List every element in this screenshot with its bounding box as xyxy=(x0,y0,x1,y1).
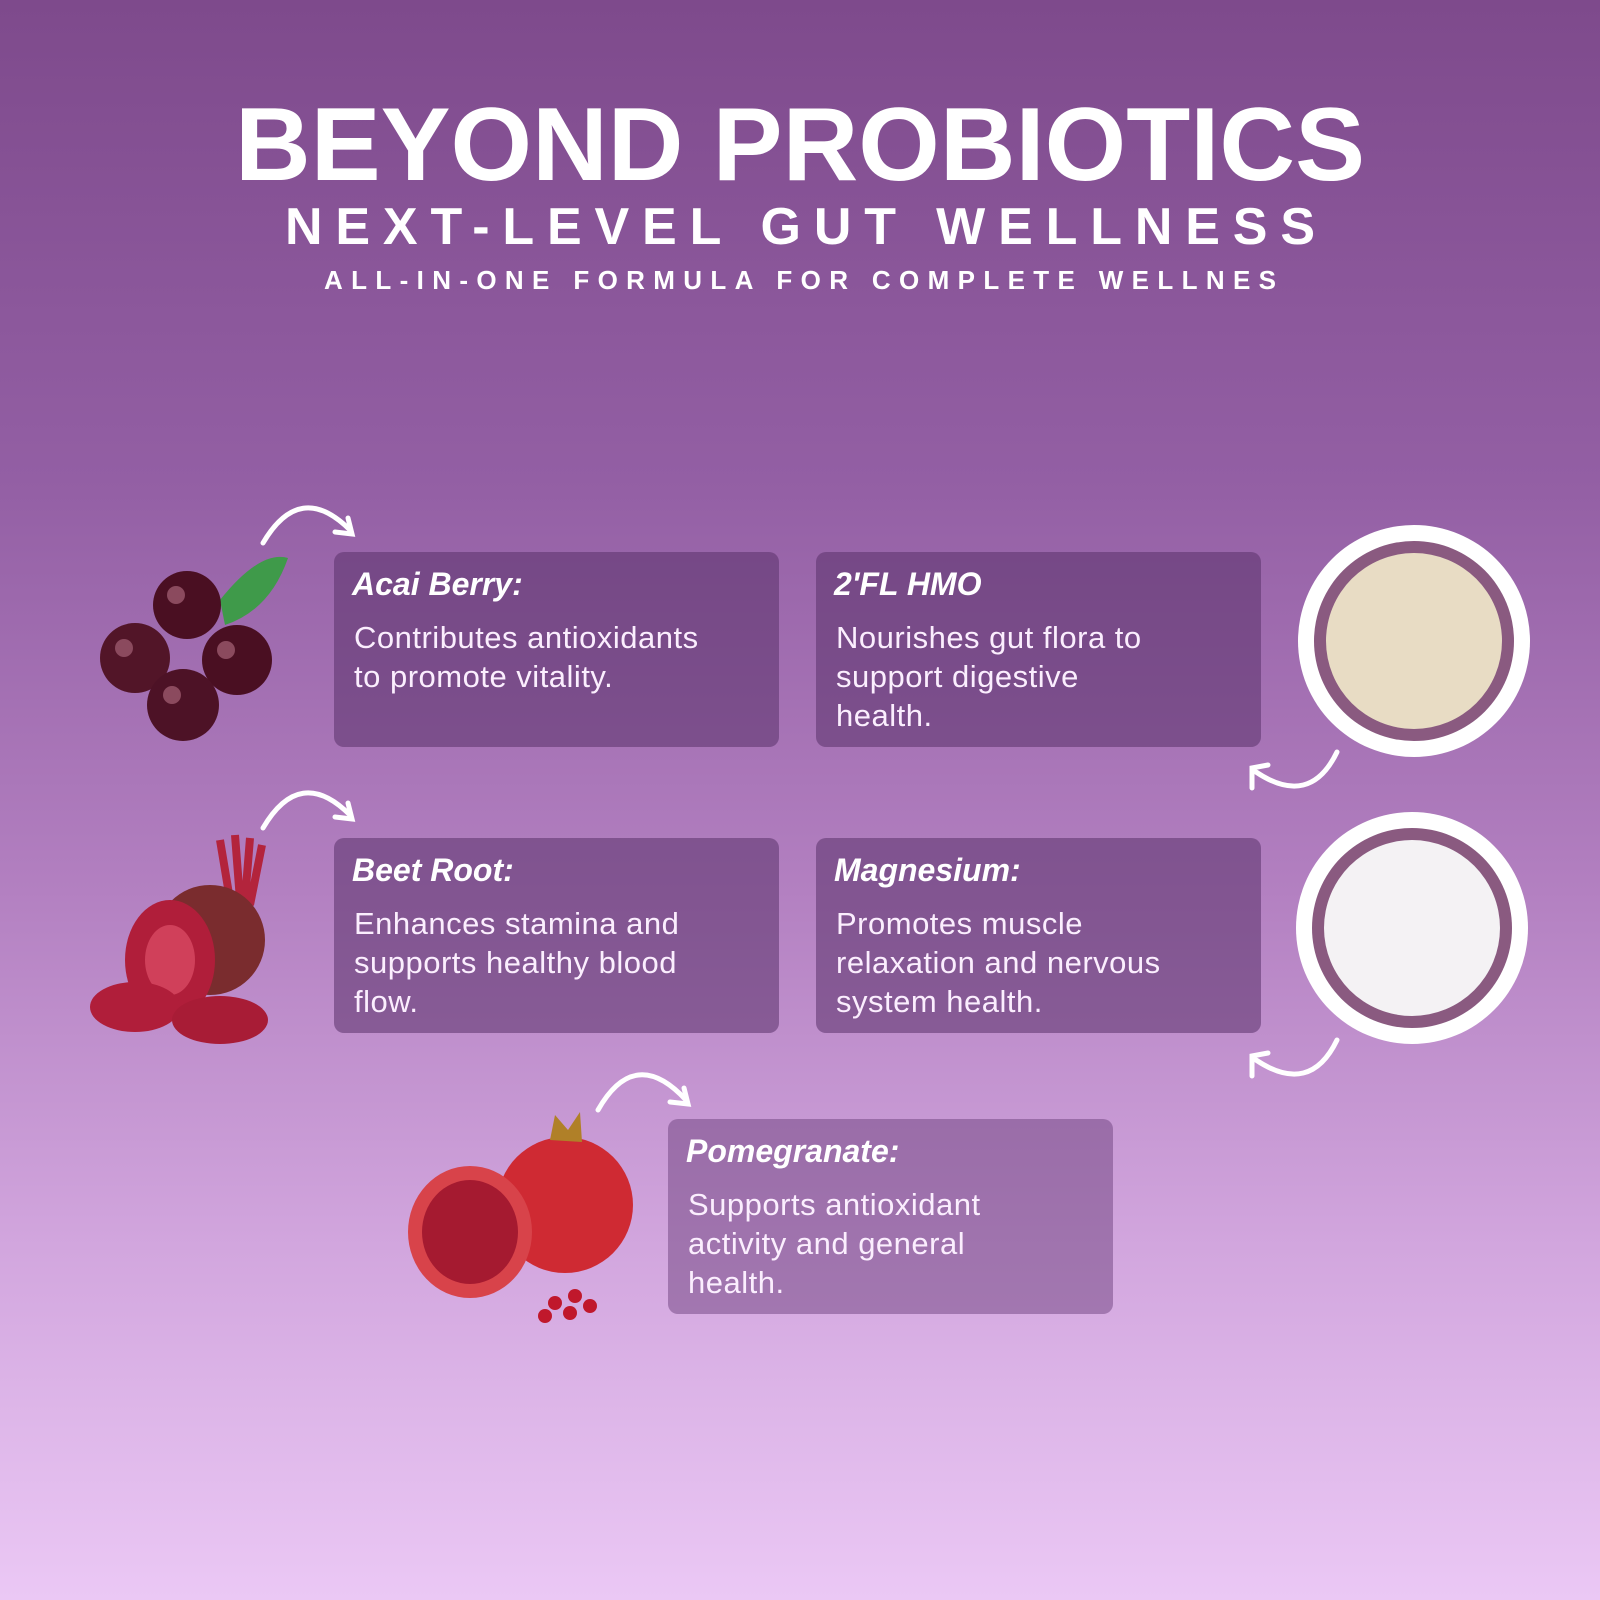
icon: magnesium powder bowl xyxy=(1296,812,1528,1044)
panel: 2'FL HMO: Nourishes gut flora to xyxy=(836,620,1142,655)
panel: beet root: supports healthy blood xyxy=(354,945,677,980)
panel: 2'FL HMO: health. xyxy=(836,698,933,733)
title: BEYOND PROBIOTICS xyxy=(235,87,1365,203)
panel: magnesium: system health. xyxy=(836,984,1043,1019)
panel: 2'FL HMO: support digestive xyxy=(836,659,1079,694)
panel: pomegranate: health. xyxy=(688,1265,785,1300)
panel: magnesium: Promotes muscle xyxy=(836,906,1083,941)
panel: pomegranate: Supports antioxidant xyxy=(688,1187,981,1222)
panel: pomegranate xyxy=(668,1119,1113,1314)
panel: beet root: Beet Root: xyxy=(352,852,514,888)
panel: 2'FL HMO: 2'FL HMO xyxy=(834,566,981,602)
panel: acai berry: Contributes antioxidants xyxy=(354,620,699,655)
icon: acai berries xyxy=(100,557,288,741)
icon: beet root xyxy=(90,835,268,1044)
panel: magnesium xyxy=(816,838,1261,1033)
panel: acai berry: Acai Berry: xyxy=(352,566,523,602)
tagline: ALL-IN-ONE FORMULA FOR COMPLETE WELLNES xyxy=(324,265,1276,295)
panel: pomegranate: activity and general xyxy=(688,1226,965,1261)
panel: 2'FL HMO xyxy=(816,552,1261,747)
panel: magnesium: relaxation and nervous xyxy=(836,945,1161,980)
subtitle: NEXT-LEVEL GUT WELLNESS xyxy=(285,198,1315,256)
panel: beet root: flow. xyxy=(354,984,419,1019)
panel: pomegranate: Pomegranate: xyxy=(686,1133,899,1169)
title block xyxy=(235,87,1365,295)
panel: beet root xyxy=(334,838,779,1033)
panel: magnesium: Magnesium: xyxy=(834,852,1021,888)
icon: HMO powder bowl xyxy=(1298,525,1530,757)
arrows xyxy=(263,508,1337,1110)
icon: pomegranate xyxy=(408,1112,633,1323)
panel: acai berry xyxy=(334,552,779,747)
panel: acai berry: to promote vitality. xyxy=(354,659,613,694)
panel: beet root: Enhances stamina and xyxy=(354,906,679,941)
